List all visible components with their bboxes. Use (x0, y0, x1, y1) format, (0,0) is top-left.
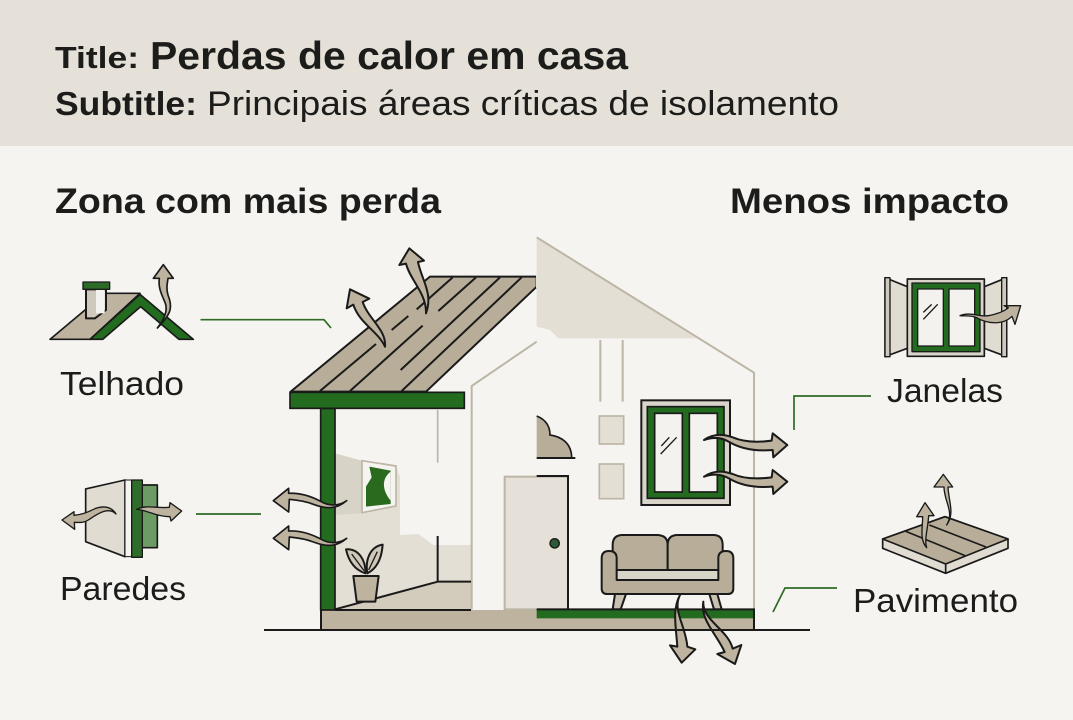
arrow: roof loss 2 (399, 248, 428, 313)
subtitle label: Subtitle: (55, 85, 197, 122)
house illustration (264, 237, 810, 664)
heading: menos impacto: Menos impacto (730, 182, 1009, 221)
ground line (264, 629, 810, 631)
subtitle text: Principais áreas críticas de isolamento (207, 85, 839, 123)
framed picture (362, 461, 396, 513)
callout line: telhado (200, 320, 331, 328)
panel: paredes (60, 480, 261, 607)
green floor strip (537, 609, 754, 618)
icon: wall (62, 480, 182, 557)
label: paredes: Paredes (60, 570, 186, 607)
arrow: floor loss 1 (670, 595, 695, 663)
roof (291, 275, 538, 392)
panel: janelas (794, 278, 1021, 430)
label: telhado: Telhado (60, 365, 184, 402)
green post (321, 408, 335, 610)
window (641, 400, 730, 505)
title text: Perdas de calor em casa (150, 35, 628, 78)
wall outline (472, 342, 537, 609)
callout line: janelas (794, 396, 871, 430)
cloud shape (537, 416, 572, 458)
arrow: wall loss 1 (273, 488, 347, 512)
callout line: pavimento (773, 588, 837, 612)
gable (537, 237, 697, 338)
potted plant (346, 545, 383, 602)
icon: window with shutters (885, 278, 1021, 357)
arrow: roof loss 1 (347, 289, 385, 347)
arrow: window loss 2 (704, 470, 787, 494)
label: pavimento: Pavimento (853, 582, 1018, 619)
title: Title: (55, 40, 139, 75)
panel: pavimento (773, 474, 1018, 619)
icon: floor tile (883, 474, 1008, 573)
callout line: paredes (196, 513, 261, 515)
icon: roof (50, 265, 193, 339)
arrow: floor loss 2 (703, 602, 741, 664)
floor slab (322, 610, 754, 630)
right section of house (505, 237, 787, 664)
panel: telhado (50, 265, 331, 402)
label: janelas: Janelas (887, 372, 1003, 409)
header band (0, 0, 1073, 146)
sofa (602, 535, 733, 609)
arrow: wall loss 2 (273, 526, 347, 550)
door (505, 476, 568, 609)
green roof beam (290, 392, 464, 408)
left section of house (273, 248, 538, 630)
arrow: window loss 1 (704, 433, 787, 457)
heading: zona com mais perda: Zona com mais perda (55, 182, 442, 221)
